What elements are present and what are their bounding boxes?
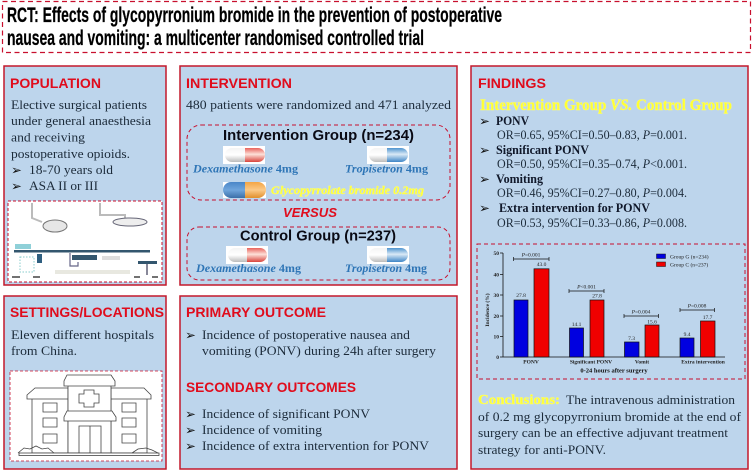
- conclusion: The intravenous administration: [566, 392, 736, 407]
- settings text: [11, 327, 154, 358]
- bar chart: 17.7: [703, 315, 713, 321]
- primary outcome text: vomiting (PONV) during 24h after surgery: [202, 343, 437, 358]
- population text: ➢: [11, 164, 22, 178]
- population text: and receiving: [11, 130, 86, 144]
- findings list: ➢: [479, 144, 490, 158]
- population text: ASA II or III: [29, 178, 98, 193]
- findings list: PONV: [496, 114, 529, 128]
- bar chart: 40: [494, 272, 499, 278]
- secondary outcomes list: Incidence of vomiting: [202, 422, 323, 437]
- chart legend: Group C (n=237): [670, 262, 708, 268]
- title: nausea and vomiting: a multicenter randomised controlled trial: [7, 27, 424, 50]
- secondary outcomes list: ➢: [185, 408, 196, 422]
- label: tropisetron: Tropisetron 4mg: [345, 261, 427, 275]
- population text: postoperative opioids.: [11, 146, 130, 161]
- population text: Elective surgical patients: [11, 97, 147, 112]
- panel: settings: [4, 296, 166, 469]
- heading: population: POPULATION: [10, 75, 101, 91]
- heading: intervention group: Intervention Group (n=234): [223, 128, 414, 144]
- bar chart: Incidence (%): [484, 293, 491, 327]
- settings text: from China.: [11, 343, 77, 358]
- findings list: ➢: [479, 114, 490, 130]
- text: patients analysed: 480 patients were randomized and 471 analyzed: [186, 97, 452, 112]
- population text: under general anaesthesia: [11, 113, 151, 128]
- conclusion: [478, 392, 742, 457]
- findings list: Significant PONV: [496, 143, 589, 157]
- bar chart: 43.0: [537, 262, 547, 268]
- conclusion: Conclusions:: [478, 392, 560, 407]
- bar chart: 27.8: [516, 293, 526, 299]
- bar chart: 14.1: [572, 322, 582, 328]
- bar chart: 10: [494, 334, 499, 340]
- chart legend: Group G (n=234): [670, 254, 709, 260]
- heading: control group: Control Group (n=237): [240, 228, 396, 244]
- bar chart: Significant PONV: [570, 360, 612, 366]
- bar chart: P<0.001: [576, 284, 596, 290]
- findings list: Vomiting: [496, 172, 544, 186]
- findings list: OR=0.46, 95%CI=0.27–0.80, P=0.004.: [497, 185, 687, 200]
- panel: outcomes: [180, 296, 457, 469]
- label: dexamethasone: Dexamethasone 4mg: [192, 162, 298, 176]
- bar chart: 0-24 hours after surgery: [580, 368, 648, 374]
- panel: intervention: [180, 66, 457, 285]
- image: hospital: [10, 371, 162, 461]
- chart legend: [656, 254, 709, 268]
- control group box: [187, 227, 450, 280]
- findings list: [479, 114, 687, 230]
- bar chart: 9.4: [684, 332, 691, 338]
- label: dexamethasone: Dexamethasone 4mg: [195, 261, 301, 275]
- heading: settings: SETTINGS/LOCATIONS: [10, 304, 164, 320]
- bar chart: P=0.008: [687, 304, 707, 310]
- panel: findings: [471, 66, 748, 469]
- secondary outcomes list: ➢: [185, 440, 196, 454]
- findings list: Extra intervention for PONV: [499, 201, 650, 215]
- primary outcome text: [185, 327, 437, 358]
- primary outcome text: Incidence of postoperative nausea and: [202, 327, 411, 342]
- heading: findings: FINDINGS: [478, 75, 546, 91]
- bar chart: 27.8: [592, 294, 602, 300]
- pill: glycopyrrolate: [223, 182, 266, 198]
- population text: 18-70 years old: [29, 162, 114, 177]
- conclusion: of 0.2 mg glycopyrronium bromide at the end of: [478, 409, 742, 424]
- bar chart: PONV: [523, 360, 539, 366]
- title: [2, 2, 750, 52]
- pill: tropisetron: [367, 146, 409, 164]
- bar chart: Extra intervention: [681, 360, 725, 366]
- bar chart: [477, 244, 745, 379]
- intervention group box: [187, 125, 450, 200]
- image: operating room: [8, 201, 162, 282]
- pill: dexamethasone: [223, 146, 265, 164]
- secondary outcomes list: [185, 406, 430, 454]
- subheading: group comparison: Intervention Group VS. Control Group: [480, 97, 732, 114]
- conclusion: strategy for anti-PONV.: [478, 442, 606, 457]
- findings list: OR=0.53, 95%CI=0.33–0.86, P=0.008.: [497, 215, 687, 230]
- findings list: OR=0.65, 95%CI=0.50–0.83, P=0.001.: [497, 127, 687, 142]
- versus: VERSUS: [283, 205, 337, 220]
- primary outcome text: ➢: [185, 328, 196, 344]
- bar chart: 50: [494, 251, 499, 257]
- secondary outcomes list: Incidence of significant PONV: [202, 406, 371, 421]
- heading: secondary outcomes: SECONDARY OUTCOMES: [186, 379, 356, 395]
- heading: intervention: INTERVENTION: [186, 75, 292, 91]
- findings list: OR=0.50, 95%CI=0.35–0.74, P<0.001.: [497, 156, 687, 171]
- bar chart: Vomit: [635, 360, 649, 366]
- bar chart: 0: [496, 355, 499, 361]
- title: RCT: Effects of glycopyrronium bromide in the prevention of postoperative: [7, 4, 502, 27]
- secondary outcomes list: Incidence of extra intervention for PONV: [202, 438, 430, 453]
- settings text: Eleven different hospitals: [11, 327, 154, 342]
- findings list: ➢: [479, 202, 490, 216]
- bar chart: 7.3: [628, 336, 635, 342]
- bar chart: P=0.004: [631, 310, 651, 316]
- population text: [11, 97, 151, 194]
- conclusion: surgery can be an effective adjuvant treatment: [478, 425, 728, 440]
- bar chart: 15.6: [647, 320, 657, 326]
- heading: primary outcome: PRIMARY OUTCOME: [186, 304, 326, 320]
- population text: ➢: [11, 180, 22, 194]
- bar chart: P=0.001: [521, 252, 541, 258]
- bar chart: 20: [494, 314, 499, 320]
- pill: dexamethasone: [226, 246, 268, 264]
- panel: population: [4, 66, 166, 285]
- label: glycopyrrolate: Glycopyrrolate bromide 0.2mg: [271, 183, 424, 197]
- secondary outcomes list: ➢: [185, 424, 196, 438]
- bar chart: 30: [494, 293, 499, 299]
- pill: tropisetron: [367, 246, 409, 264]
- findings list: ➢: [479, 172, 490, 188]
- label: tropisetron: Tropisetron 4mg: [345, 162, 428, 176]
